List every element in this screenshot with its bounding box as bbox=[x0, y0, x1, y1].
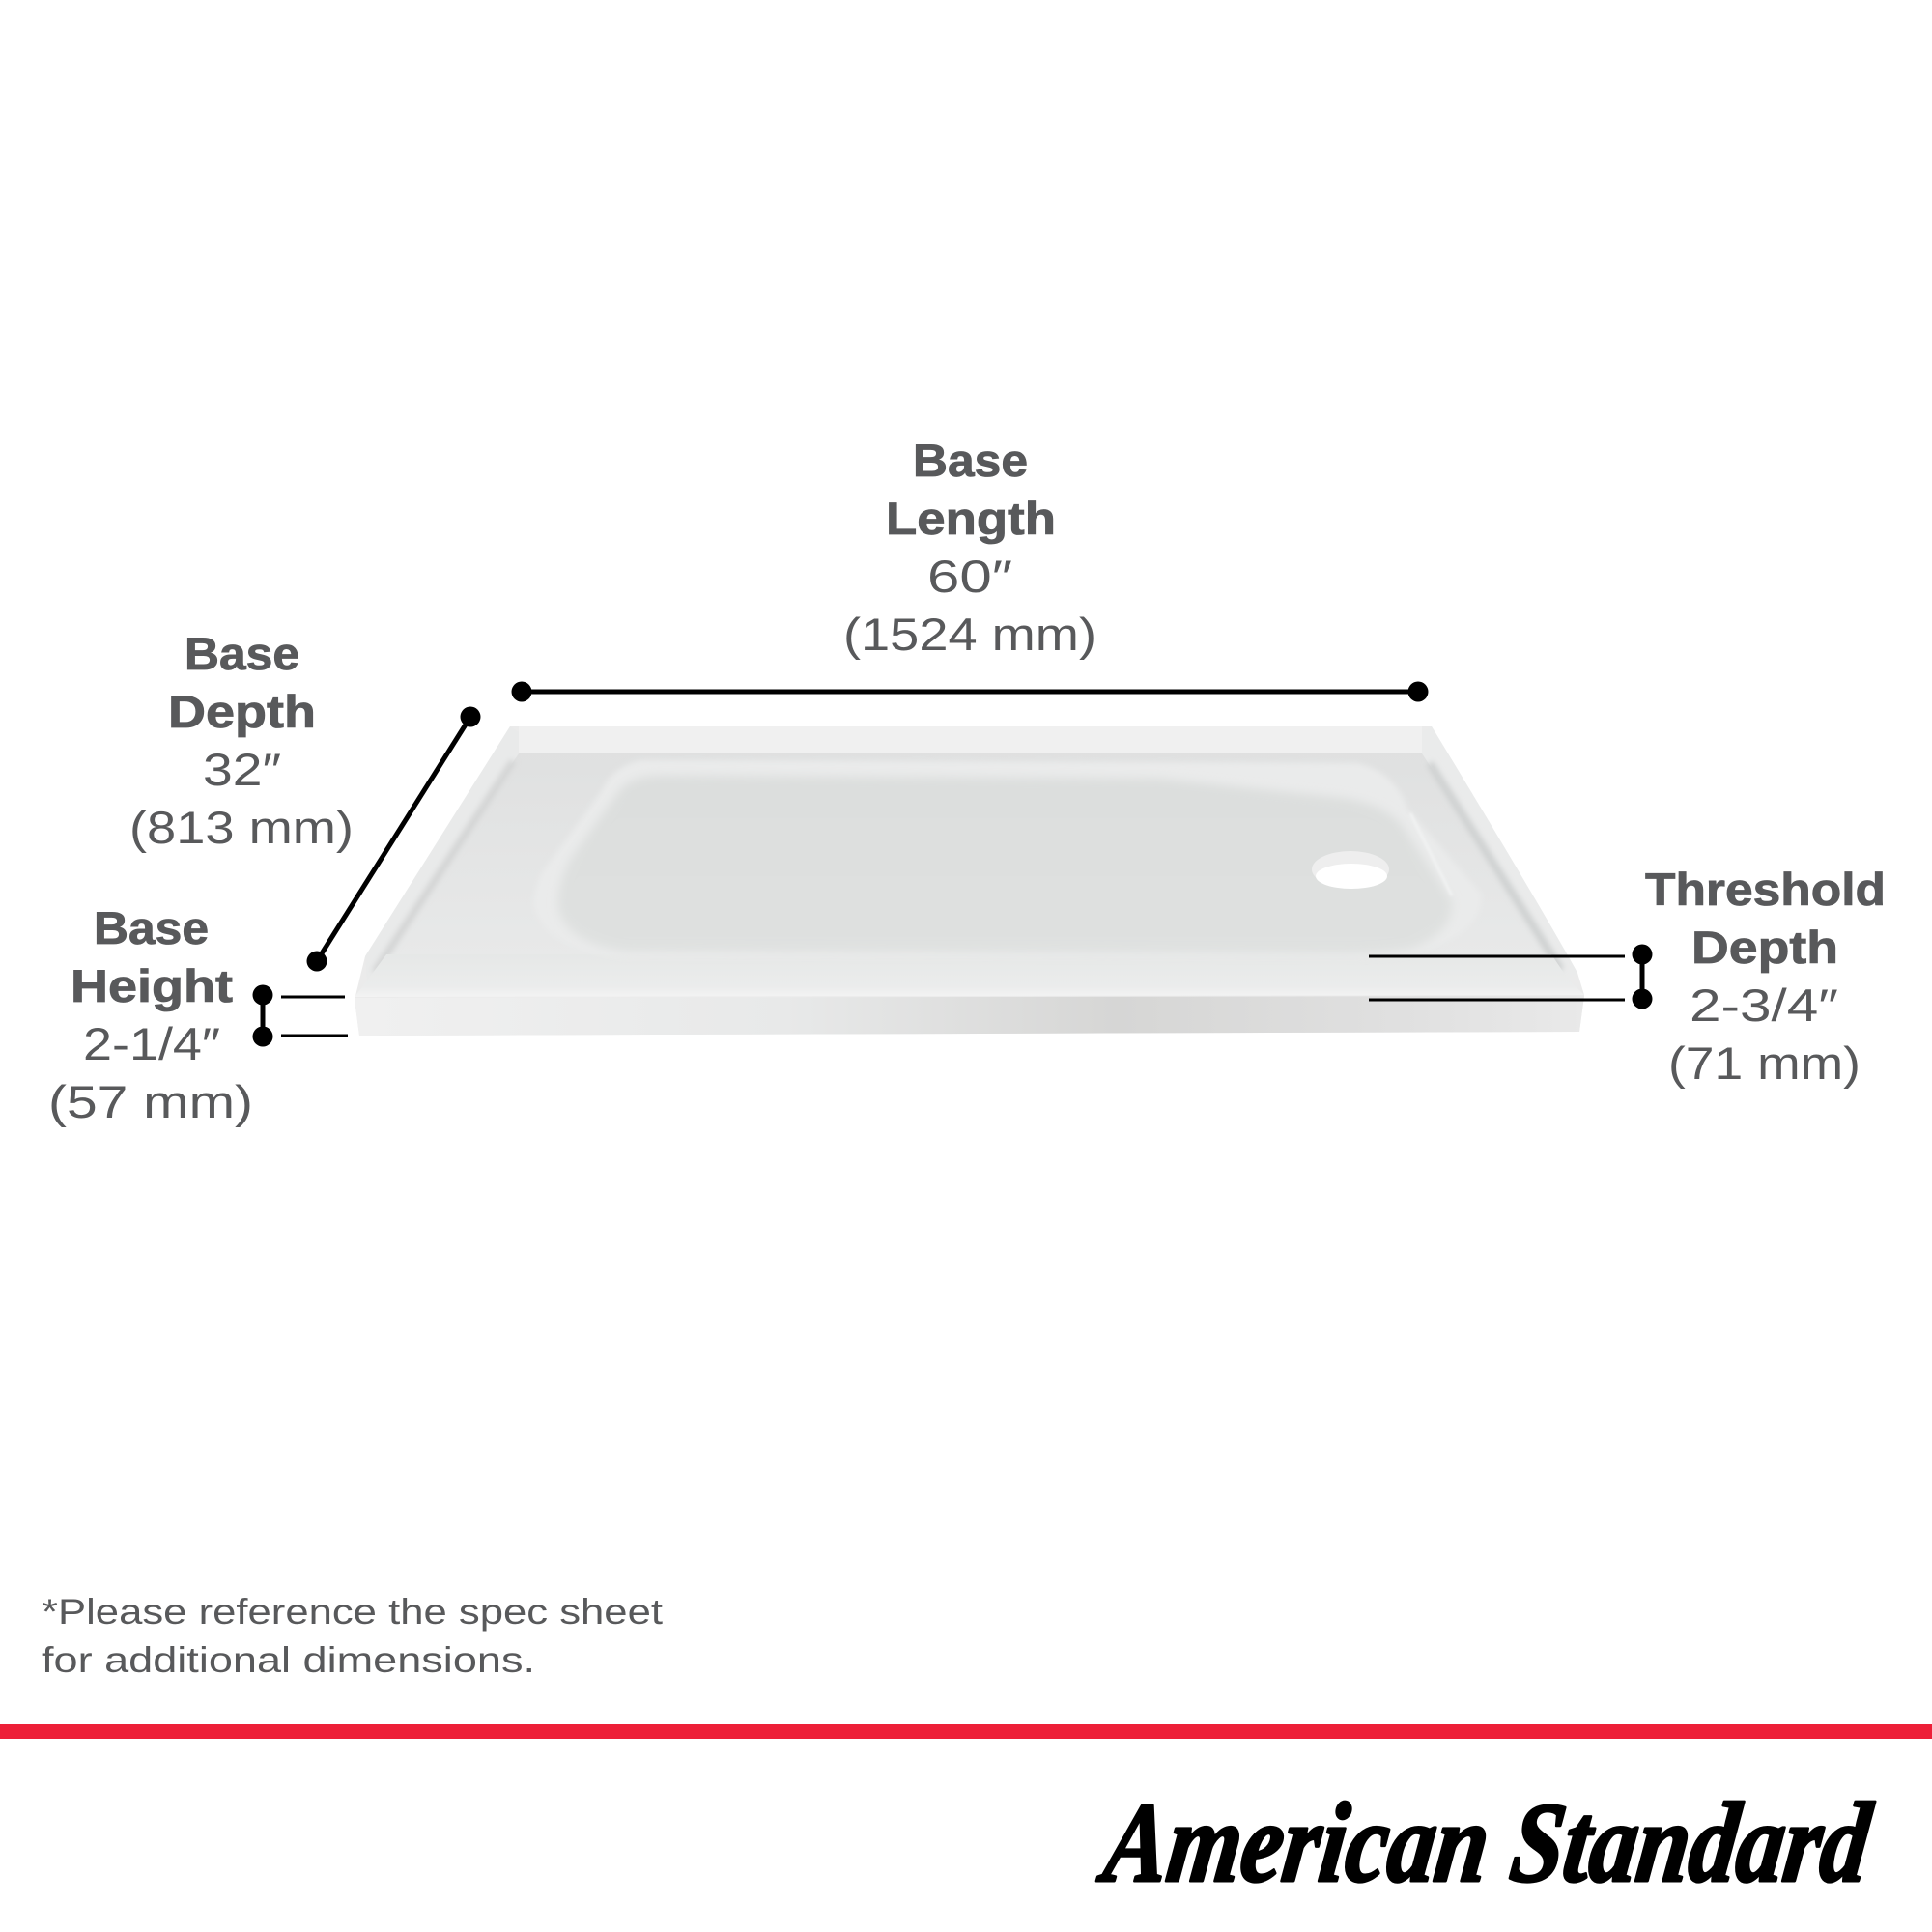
drain bbox=[1312, 851, 1389, 889]
label: threshold depth: Threshold bbox=[1645, 864, 1886, 915]
label: base height: Base bbox=[94, 902, 209, 953]
right wall bbox=[1422, 726, 1577, 979]
label: base height bbox=[48, 902, 253, 1127]
basin rim bbox=[533, 760, 1481, 958]
base depth dimension line bbox=[307, 707, 481, 972]
label: threshold depth: 2-3/4″ bbox=[1690, 980, 1838, 1031]
left wall shadow bbox=[375, 761, 513, 972]
red divider bar bbox=[0, 1724, 1932, 1739]
label: base height: 2-1/4″ bbox=[83, 1018, 220, 1069]
label: base length bbox=[843, 435, 1096, 660]
label: threshold depth: (71 mm) bbox=[1668, 1037, 1861, 1089]
footnote: for additional dimensions. bbox=[42, 1640, 535, 1680]
label: threshold depth: Depth bbox=[1691, 922, 1838, 973]
label: threshold depth bbox=[1645, 864, 1886, 1089]
label: base depth: Depth bbox=[168, 686, 316, 737]
tray silhouette bbox=[355, 726, 1584, 1036]
label: base length: 60″ bbox=[927, 551, 1012, 602]
footnote bbox=[42, 1592, 664, 1680]
label: base height: (57 mm) bbox=[48, 1076, 253, 1127]
label: base depth: 32″ bbox=[203, 744, 281, 795]
label: base length: (1524 mm) bbox=[843, 609, 1096, 660]
shower base product illustration bbox=[355, 726, 1584, 1036]
footnote: *Please reference the spec sheet bbox=[42, 1592, 664, 1632]
tray front face bbox=[355, 996, 1584, 1036]
basin floor bbox=[558, 776, 1452, 953]
label: base depth bbox=[129, 628, 354, 853]
left wall bbox=[365, 726, 519, 980]
label: base length: Base bbox=[913, 435, 1028, 486]
basin side groove bbox=[1410, 813, 1452, 895]
threshold depth dimension marker bbox=[1369, 945, 1652, 1009]
base height dimension marker bbox=[253, 985, 348, 1047]
label: base length: Length bbox=[886, 493, 1056, 544]
label: base height: Height bbox=[71, 960, 233, 1011]
tray interior deck bbox=[367, 744, 1568, 980]
label: base depth: (813 mm) bbox=[129, 802, 354, 853]
label: base depth: Base bbox=[185, 628, 299, 679]
base length dimension line bbox=[512, 682, 1428, 701]
threshold bbox=[355, 954, 1584, 997]
back ledge bbox=[519, 726, 1422, 753]
right wall shadow bbox=[1430, 763, 1561, 970]
